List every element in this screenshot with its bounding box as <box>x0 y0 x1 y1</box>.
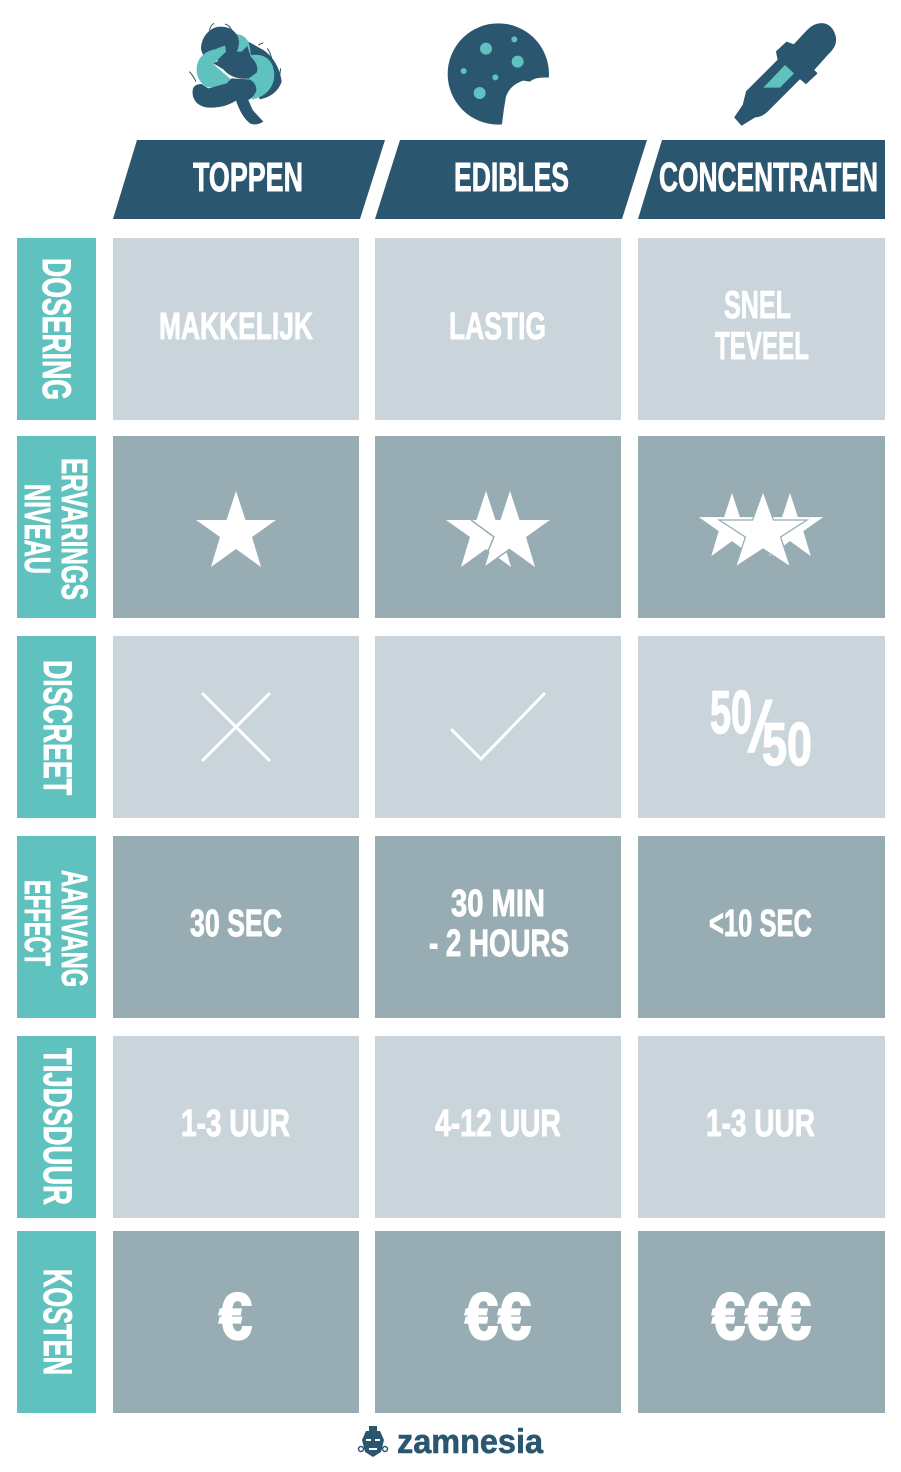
label: ervarings niveau: NIVEAU <box>17 484 58 574</box>
cell: lastig <box>375 238 621 420</box>
cell: 30 sec: 30 SEC <box>190 903 282 945</box>
cell: snel teveel <box>638 238 885 420</box>
header: concentraten <box>638 140 885 219</box>
cell: under 10 sec: <10 SEC <box>709 903 812 945</box>
cell: 50/50: / <box>747 688 773 768</box>
cell: check mark <box>375 636 621 818</box>
cell: 4-12 uur: 4-12 UUR <box>435 1103 561 1145</box>
cell: cross <box>113 636 359 818</box>
label: kosten: KOSTEN <box>35 1269 79 1375</box>
cell: three stars <box>638 436 885 618</box>
cell: makkelijk: MAKKELIJK <box>159 306 313 348</box>
cell: under 10 sec <box>638 836 885 1018</box>
cell: makkelijk <box>113 238 359 420</box>
header: toppen: TOPPEN <box>193 154 303 200</box>
label: kosten <box>17 1231 96 1413</box>
icon: dropper <box>735 24 836 125</box>
cell: snel teveel: TEVEEL <box>715 325 809 368</box>
header: toppen <box>113 140 385 219</box>
row: dosering <box>17 238 885 420</box>
cell: one star <box>113 436 359 618</box>
label: ervarings niveau <box>17 436 96 618</box>
cell: one euro <box>113 1231 359 1413</box>
label: aanvang effect <box>17 836 96 1018</box>
cell: three euros <box>638 1231 885 1413</box>
label: dosering: DOSERING <box>34 258 78 400</box>
cell: 30 min - 2 hours: - 2 HOURS <box>429 923 569 965</box>
cell: 50/50 <box>638 636 885 818</box>
label: aanvang effect: AANVANG <box>54 870 95 987</box>
header: edibles <box>375 140 647 219</box>
label: discreet <box>17 636 96 818</box>
label: discreet: DISCREET <box>35 660 79 795</box>
label: ervarings niveau: ERVARINGS <box>54 458 95 600</box>
cell: three euros: €€€ <box>712 1279 811 1353</box>
cell: 4-12 uur <box>375 1036 621 1218</box>
icon: bitten cookie <box>448 23 563 143</box>
label: dosering <box>17 238 96 420</box>
row: aanvang effect <box>17 836 885 1018</box>
cell: snel teveel: SNEL <box>724 284 791 327</box>
row: kosten <box>17 1231 885 1413</box>
cell: two stars <box>375 436 621 618</box>
cell: 1-3 uur concentraten: 1-3 UUR <box>706 1103 815 1145</box>
row: ervaringsniveau <box>17 436 885 618</box>
icon: tribal mask <box>358 1426 388 1457</box>
cell: 30 sec <box>113 836 359 1018</box>
cell: 30 min - 2 hours: 30 MIN <box>451 883 545 925</box>
label: tijdsduur: TIJDSDUUR <box>35 1048 79 1205</box>
cell: one euro: € <box>219 1279 252 1353</box>
cell: 30 min - 2 hours <box>375 836 621 1018</box>
header: edibles: EDIBLES <box>454 154 569 200</box>
icon: cotton bud <box>189 23 282 124</box>
cell: 50/50: 50 <box>710 679 752 746</box>
row: discreet <box>17 636 885 818</box>
label: aanvang effect: EFFECT <box>17 880 58 966</box>
row: tijdsduur <box>17 1036 885 1218</box>
cell: two euros: €€ <box>465 1279 531 1353</box>
logo: zamnesia: zamnesia <box>397 1423 544 1461</box>
cell: lastig: LASTIG <box>449 306 546 348</box>
label: tijdsduur <box>17 1036 96 1218</box>
cell: 1-3 uur concentraten <box>638 1036 885 1218</box>
cell: two euros <box>375 1231 621 1413</box>
cell: 1-3 uur <box>113 1036 359 1218</box>
cell: 1-3 uur: 1-3 UUR <box>181 1103 290 1145</box>
cell: 50/50: 50 <box>762 711 812 778</box>
